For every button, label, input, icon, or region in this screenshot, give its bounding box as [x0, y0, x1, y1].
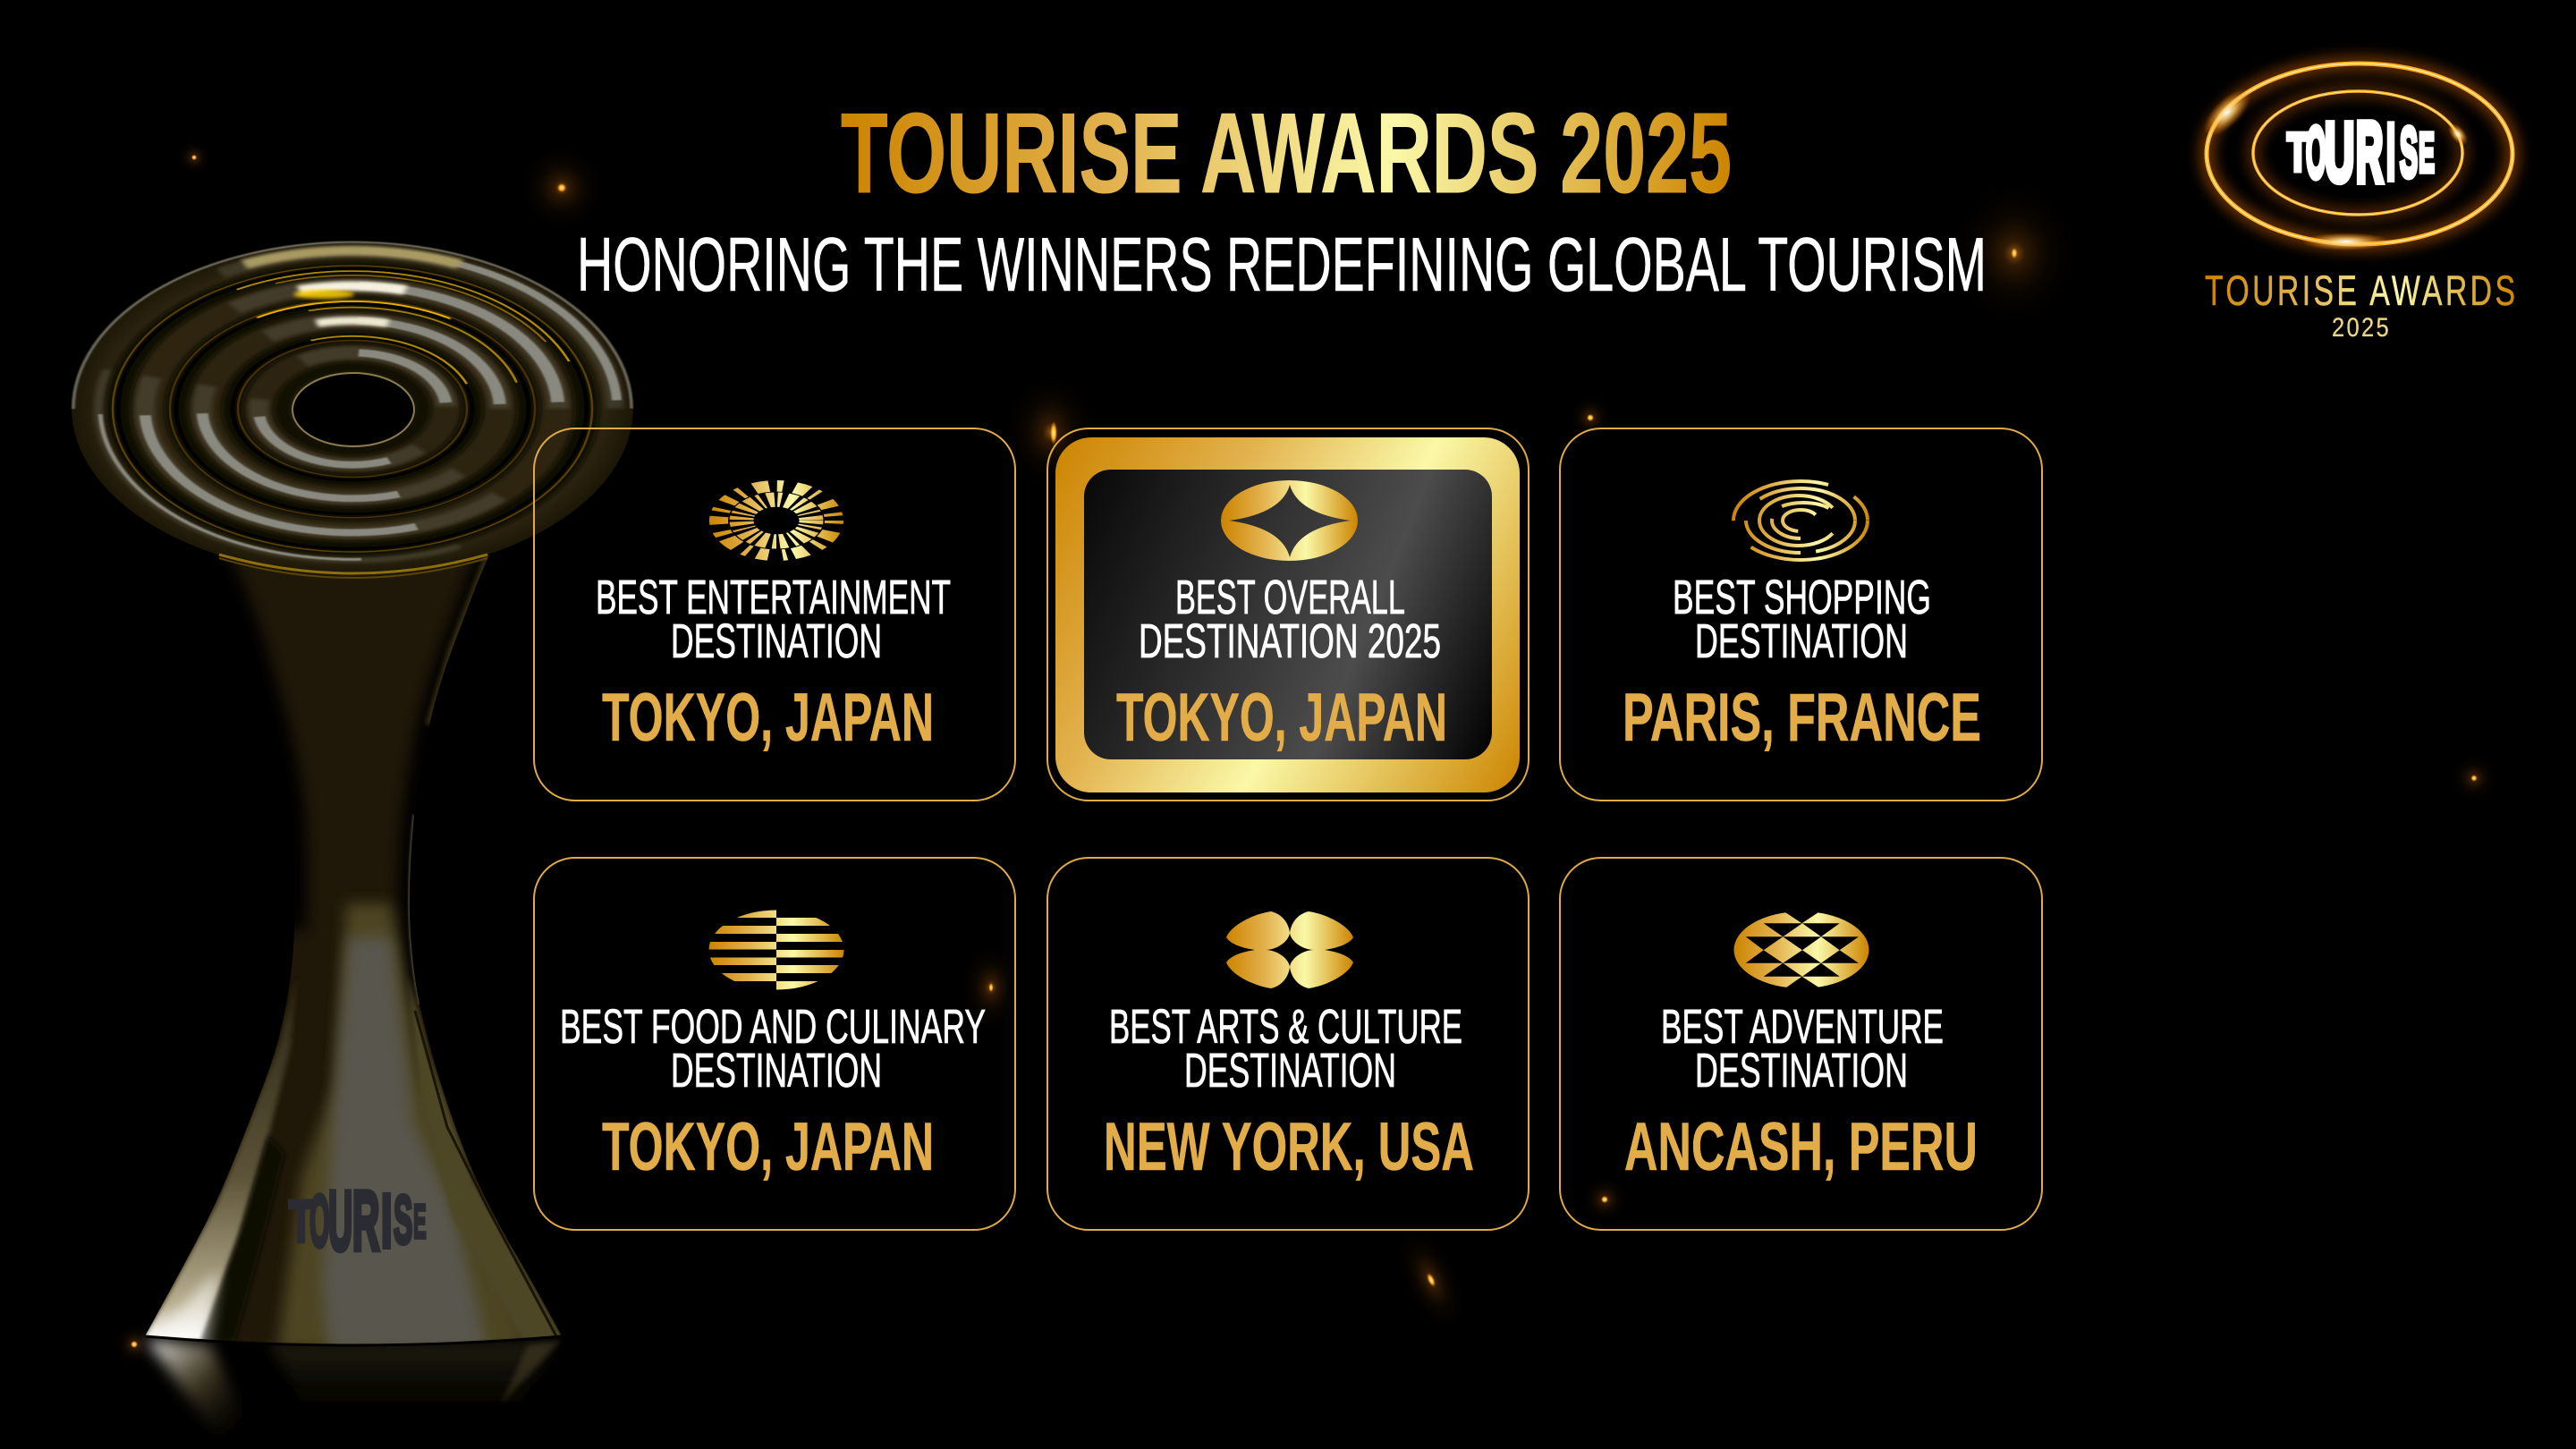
winner: NEW YORK, USA: [1104, 1109, 1474, 1185]
winner: TOKYO, JAPAN: [602, 1109, 934, 1185]
trophy dish: [72, 241, 633, 575]
panel: best entertainment: [534, 428, 1015, 801]
background sparkles: [111, 138, 2501, 1368]
trophy engraved wordmark: U: [328, 1174, 352, 1268]
trophy stem: [125, 546, 572, 1360]
heading line 2: DESTINATION: [1184, 1044, 1396, 1097]
trophy engraved wordmark: I: [381, 1180, 393, 1264]
trophy engraved wordmark: S: [394, 1182, 412, 1258]
heading line 2: DESTINATION: [1695, 1044, 1908, 1097]
heading: BEST FOOD AND CULINARY: [560, 1000, 986, 1054]
gold frame: [1055, 437, 1520, 792]
winner: PARIS, FRANCE: [1623, 680, 1981, 756]
panel: best food and culinary: [534, 858, 1015, 1230]
icon: triangle lattice: [1733, 911, 1869, 989]
panel: best arts and culture: [1047, 858, 1529, 1230]
logo wordmark: S: [2400, 114, 2418, 191]
panel: best adventure: [1560, 858, 2042, 1230]
winner: TOKYO, JAPAN: [602, 680, 934, 756]
title: TOURISE AWARDS 2025: [841, 89, 1732, 216]
trophy base reflection: [147, 1340, 562, 1440]
logo: Tourise Awards: [2196, 64, 2515, 342]
logo wordmark: T: [2287, 122, 2309, 182]
logo wordmark: I: [2386, 108, 2395, 197]
logo wordmark: O: [2306, 112, 2326, 192]
heading line 2: DESTINATION: [671, 1044, 882, 1097]
logo year: 2025: [2332, 312, 2389, 342]
heading: BEST ARTS & CULTURE: [1109, 1000, 1462, 1054]
winner: TOKYO, JAPAN: [1116, 680, 1447, 756]
logo wordmark: R: [2356, 106, 2383, 200]
inner dark plate: [1084, 470, 1492, 759]
heading line 2: DESTINATION: [671, 614, 882, 668]
icon: four petals: [1226, 911, 1353, 988]
heading line 2: DESTINATION 2025: [1139, 614, 1441, 668]
icon: radial burst: [719, 486, 834, 555]
heading: BEST OVERALL: [1175, 571, 1405, 624]
heading line 2: DESTINATION: [1695, 614, 1908, 668]
logo wordmark: U: [2325, 106, 2354, 199]
icon: spiral rings: [1733, 481, 1868, 560]
trophy engraved wordmark: [289, 1174, 427, 1268]
heading: BEST SHOPPING: [1673, 571, 1931, 624]
trophy engraved wordmark: O: [309, 1181, 330, 1263]
heading: BEST ENTERTAINMENT: [596, 571, 951, 624]
logo wordmark: [2287, 106, 2435, 200]
trophy engraved wordmark: E: [413, 1195, 427, 1249]
heading: BEST ADVENTURE: [1661, 1000, 1944, 1054]
trophy engraved wordmark: R: [352, 1174, 379, 1268]
panel: best overall (highlighted): [1047, 428, 1529, 801]
winner: ANCASH, PERU: [1624, 1109, 1978, 1185]
icon: four-point star: [1221, 480, 1358, 561]
trophy lip: [219, 555, 487, 578]
trophy base edge: [145, 1336, 562, 1345]
trophy engraved wordmark: T: [289, 1188, 313, 1254]
icon: striped ellipse: [708, 910, 844, 990]
trophy: [72, 241, 633, 1440]
logo caption: TOURISE AWARDS: [2205, 267, 2515, 314]
logo glowing rings: [2196, 64, 2512, 250]
logo wordmark: E: [2419, 123, 2435, 184]
panel: best shopping: [1560, 428, 2042, 801]
